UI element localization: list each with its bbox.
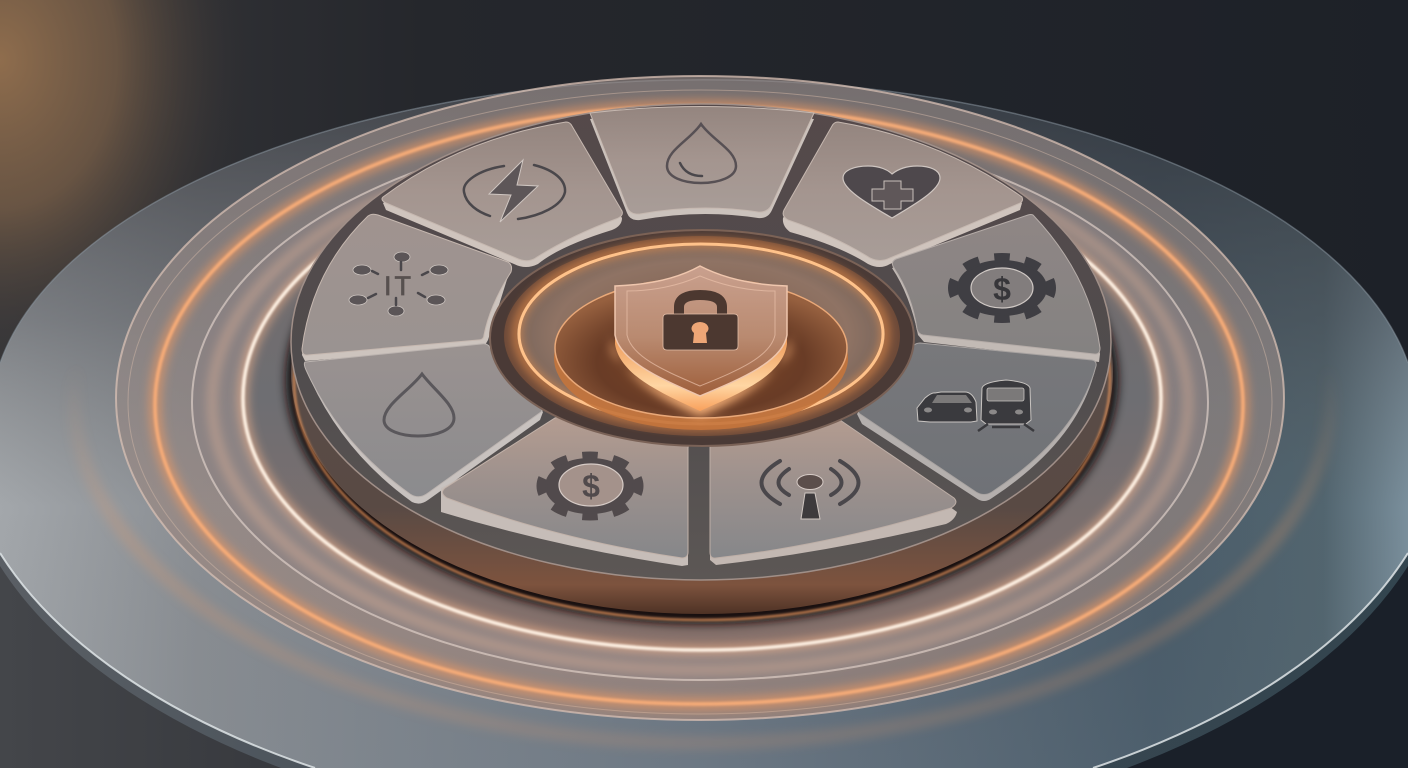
icon: water drop	[667, 124, 736, 183]
tile: water drop top	[590, 106, 814, 220]
tile: finance gear bottom	[441, 417, 688, 566]
central glass disc	[554, 278, 848, 430]
icon: gear with dollar: $	[582, 468, 600, 504]
central shield with lock	[610, 266, 792, 416]
icon: droplet outline	[384, 374, 454, 436]
icon: car and train	[917, 380, 1034, 431]
icon: wireless tower	[762, 461, 858, 519]
tile: transport	[857, 343, 1096, 501]
shield face	[615, 266, 787, 396]
icon: IT network: IT	[384, 271, 414, 301]
floor below platter	[0, 430, 1408, 768]
outer glass ring	[116, 76, 1284, 720]
white glow ring	[243, 146, 1161, 650]
icon: IT network	[349, 252, 448, 316]
central well with glow ring	[490, 230, 914, 446]
inner glass ring	[192, 124, 1208, 680]
icon: gear with dollar: $	[993, 271, 1011, 307]
tile: telecom	[710, 417, 957, 565]
tile: finance gear right	[892, 214, 1100, 362]
orange glow ring	[155, 106, 1243, 704]
shield underside	[615, 310, 787, 411]
car	[917, 392, 977, 422]
tile: water drop left	[304, 344, 543, 504]
tile: health	[783, 122, 1022, 267]
icon: heart with cross	[843, 166, 940, 218]
icon: gear with dollar	[955, 260, 1049, 316]
lock	[663, 295, 738, 350]
tile: energy	[382, 122, 622, 267]
hub base	[286, 104, 1118, 624]
shield glow base	[610, 330, 792, 416]
train	[978, 380, 1034, 431]
icon: gear with dollar	[543, 458, 637, 514]
icon: lightning in ring	[464, 160, 565, 222]
tile: information technology	[302, 214, 512, 361]
